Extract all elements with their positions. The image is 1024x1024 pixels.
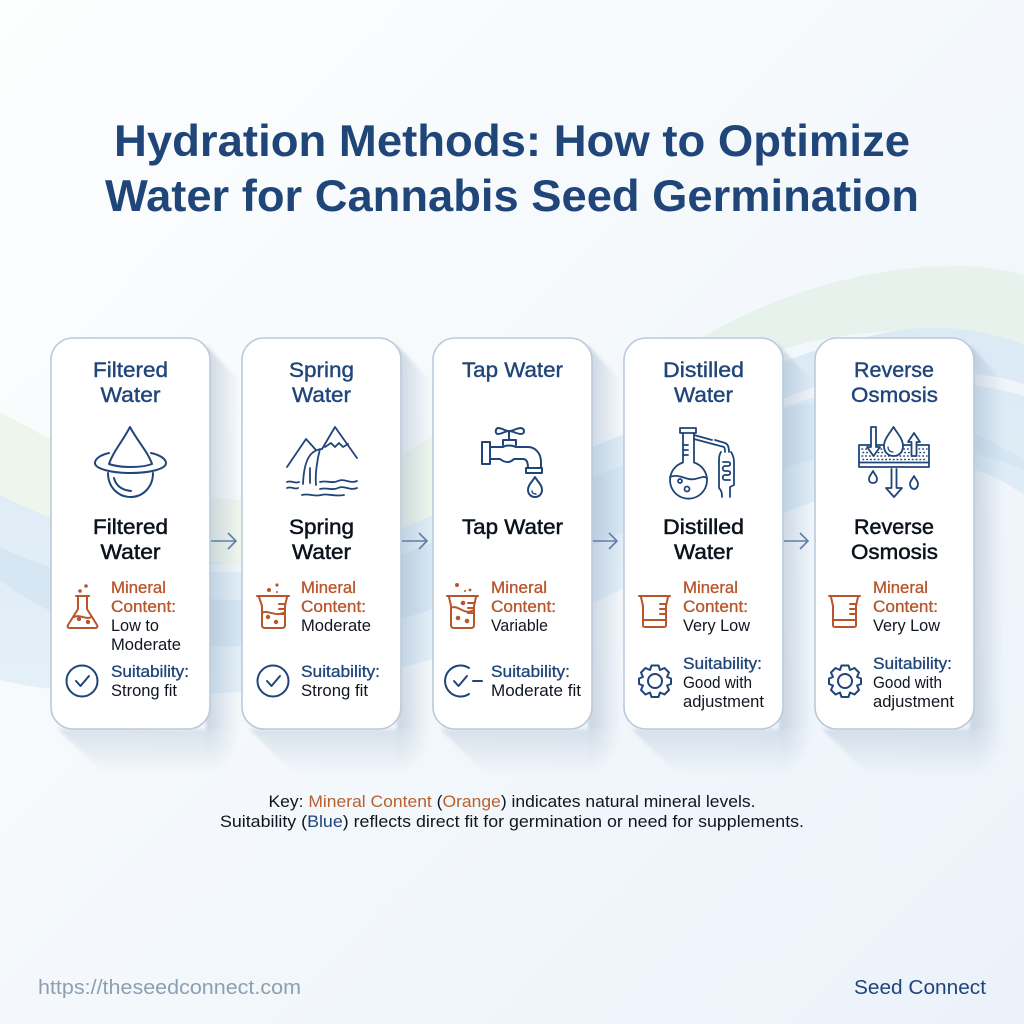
name: distilled water <box>663 515 744 564</box>
icon: faucet <box>482 428 542 497</box>
text: suitability: Strong fit <box>301 682 368 700</box>
icon: check circle <box>258 666 288 696</box>
panel: spring water <box>242 338 401 729</box>
text: suitability: Suitability: <box>873 655 952 673</box>
heading: spring water: Water <box>292 383 351 407</box>
name: tap water: Tap Water <box>462 515 563 539</box>
heading: reverse osmosis <box>851 358 938 407</box>
text: suitability: Suitability: <box>301 663 380 681</box>
text: mineral content: Mineral <box>301 579 356 597</box>
text: mineral content: Content: <box>491 598 556 616</box>
icon: gear <box>829 666 861 697</box>
text: suitability <box>873 655 954 711</box>
icon: membrane <box>859 427 929 497</box>
text: suitability: Suitability: <box>111 663 189 681</box>
key: Key: Mineral Content (Orange) indicates natural mineral levels. <box>268 793 756 811</box>
icon: distillation flask <box>670 428 734 499</box>
heading: distilled water: Distilled <box>663 358 744 382</box>
text: mineral content <box>683 579 750 635</box>
text: mineral content <box>301 579 371 635</box>
card shadows <box>58 345 1004 775</box>
heading: filtered water <box>93 358 168 407</box>
heading: reverse osmosis: Osmosis <box>851 383 938 407</box>
icon: empty beaker <box>639 596 670 627</box>
text: suitability: adjustment <box>873 693 954 711</box>
icon: mineral flask <box>68 584 97 628</box>
text: mineral content: Content: <box>873 598 938 616</box>
heading: filtered water: Filtered <box>93 358 168 382</box>
icon: mountain waterfall <box>287 427 357 496</box>
arrow: spring to tap <box>402 533 427 549</box>
title <box>105 117 919 221</box>
icon: filtered drop <box>95 427 166 497</box>
panel: reverse osmosis <box>815 338 974 729</box>
icon: gear <box>639 666 671 697</box>
text: mineral content <box>111 579 181 654</box>
text: mineral content: Very Low <box>873 617 940 635</box>
text: suitability: Good with <box>683 674 752 692</box>
text: suitability <box>683 655 764 711</box>
text: suitability: Strong fit <box>111 682 177 700</box>
icon: mineral beaker <box>447 583 478 628</box>
text: suitability <box>301 663 380 700</box>
name: spring water: Water <box>292 540 351 564</box>
name: distilled water: Distilled <box>663 515 744 539</box>
name: reverse osmosis: Reverse <box>854 515 934 539</box>
panel: filtered water <box>51 338 210 729</box>
text: mineral content <box>491 579 556 635</box>
text: suitability: Moderate fit <box>491 682 581 700</box>
heading: tap water: Tap Water <box>462 358 563 382</box>
arrow: filtered to spring <box>211 533 236 549</box>
key <box>220 793 804 831</box>
name: spring water <box>289 515 354 564</box>
title: Water for Cannabis Seed Germination <box>105 172 919 221</box>
arrow: tap to distilled <box>592 533 617 549</box>
text: mineral content: Very Low <box>683 617 750 635</box>
icon: partial check circle <box>445 666 482 696</box>
text: suitability <box>111 663 189 700</box>
text: suitability: adjustment <box>683 693 764 711</box>
name: filtered water: Filtered <box>93 515 168 539</box>
text: suitability <box>491 663 581 700</box>
heading: distilled water <box>663 358 744 407</box>
name: filtered water: Water <box>100 540 160 564</box>
name: reverse osmosis: Osmosis <box>851 540 938 564</box>
text: mineral content: Mineral <box>111 579 166 597</box>
heading: spring water: Spring <box>289 358 354 382</box>
text: mineral content <box>873 579 940 635</box>
text: suitability: Good with <box>873 674 942 692</box>
text: mineral content: Mineral <box>683 579 738 597</box>
heading: filtered water: Water <box>100 383 160 407</box>
text: mineral content: Content: <box>683 598 748 616</box>
text: mineral content: Mineral <box>491 579 547 597</box>
text: suitability: Suitability: <box>683 655 762 673</box>
icon: mineral beaker <box>257 583 289 628</box>
text: mineral content: Mineral <box>873 579 928 597</box>
key: Suitability ( Blue) reflects direct fit for germination or need for supplements. <box>220 813 804 831</box>
text: mineral content: Content: <box>301 598 366 616</box>
text: mineral content: Moderate <box>111 636 181 654</box>
footer brand: Seed Connect <box>854 977 986 999</box>
text: mineral content: Variable <box>491 617 548 635</box>
panel: tap water <box>433 338 592 729</box>
icon: empty beaker <box>829 596 860 627</box>
heading: reverse osmosis: Reverse <box>854 358 934 382</box>
text: mineral content: Low to <box>111 617 159 635</box>
name: filtered water <box>93 515 168 564</box>
name: spring water: Spring <box>289 515 354 539</box>
icon: check circle <box>66 666 98 696</box>
arrow: distilled to reverse osmosis <box>783 533 808 549</box>
footer url: https://theseedconnect.com <box>38 977 301 999</box>
name: distilled water: Water <box>674 540 733 564</box>
title: Hydration Methods: How to Optimize <box>114 117 910 166</box>
name: reverse osmosis <box>851 515 938 564</box>
text: mineral content: Content: <box>111 598 176 616</box>
text: mineral content: Moderate <box>301 617 371 635</box>
panel: distilled water <box>624 338 783 729</box>
heading: spring water <box>289 358 354 407</box>
heading: distilled water: Water <box>674 383 733 407</box>
text: suitability: Suitability: <box>491 663 570 681</box>
